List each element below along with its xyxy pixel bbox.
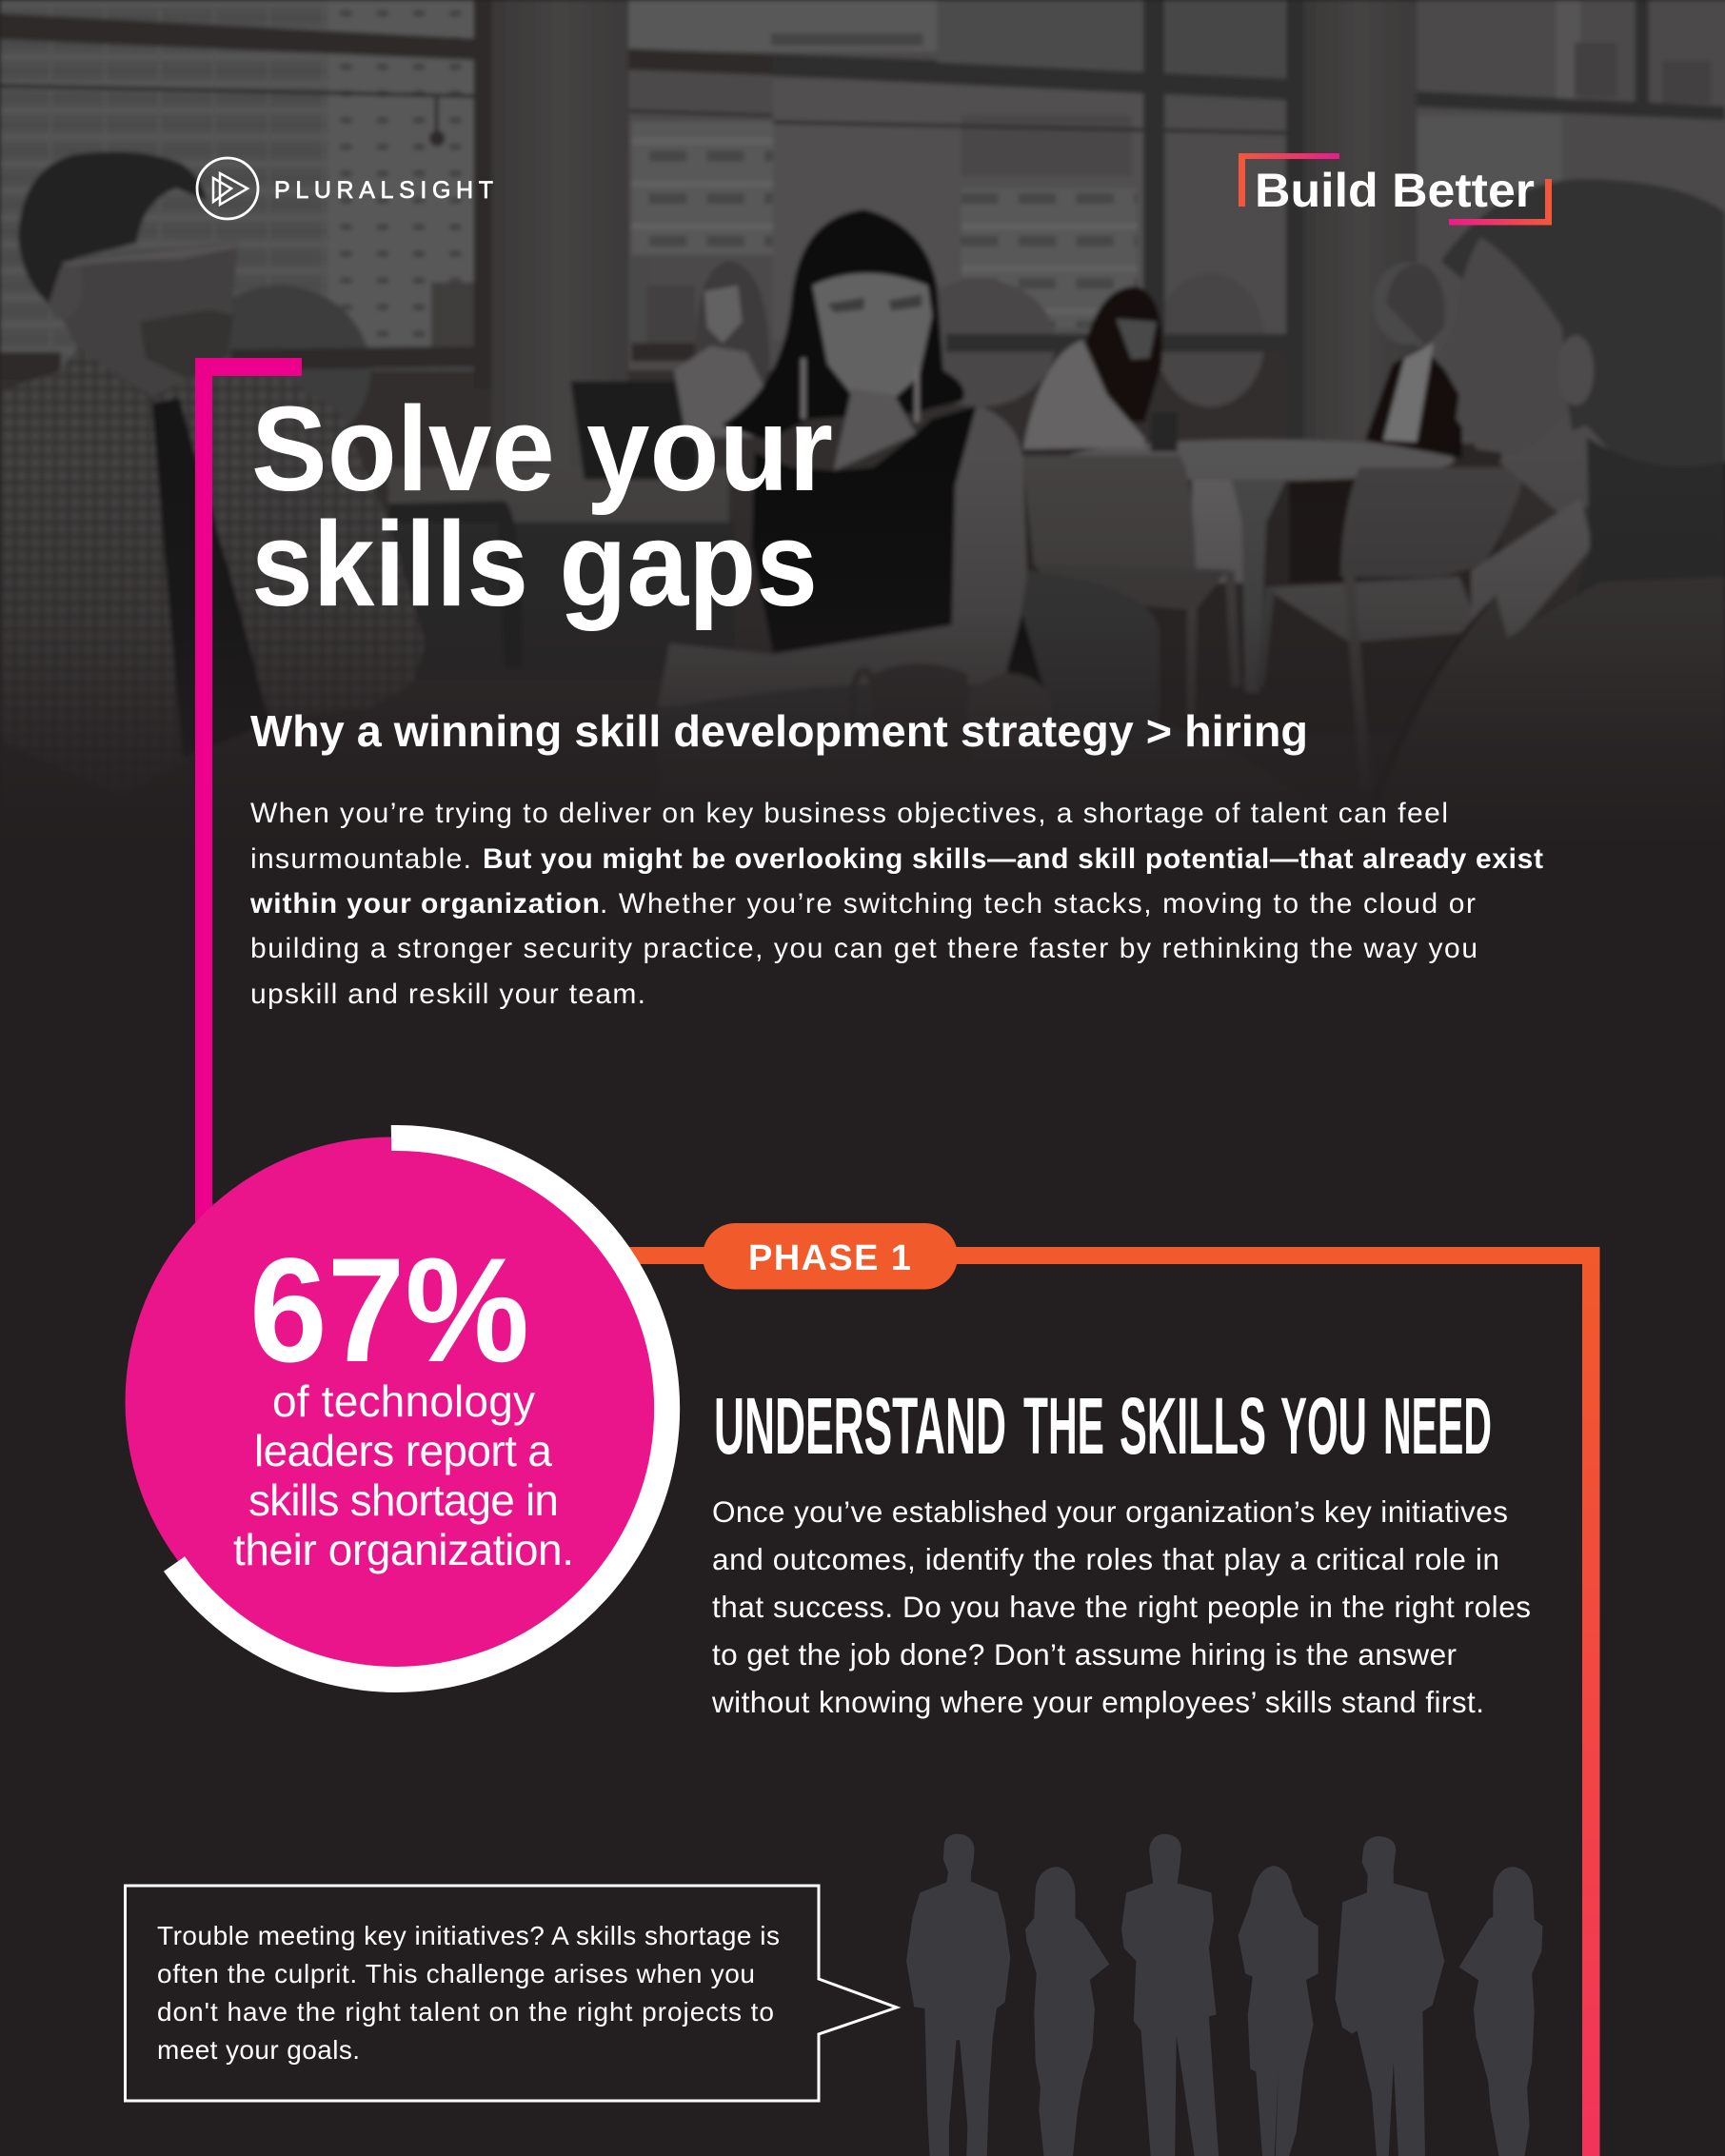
title bbox=[251, 382, 833, 631]
phase 1 text block: without knowing where your employees’ skills stand first. bbox=[711, 1685, 1484, 1719]
phase 1 text block bbox=[711, 1494, 1531, 1719]
phase 1 text block: and outcomes, identify the roles that play a critical role in bbox=[712, 1542, 1499, 1576]
central woman bbox=[658, 209, 1356, 850]
intro text block: But you might be overlooking skills—and skill potential—that already exist bbox=[483, 843, 1543, 875]
bracket: bottom right bbox=[1449, 179, 1552, 225]
column left bbox=[492, 0, 628, 467]
seated man bbox=[0, 151, 425, 796]
silhouette: man 2 bbox=[1121, 1834, 1219, 2156]
right window view bbox=[773, 0, 1725, 462]
foreground woman on right bbox=[1365, 179, 1725, 850]
phase 1 pill: PHASE 1 bbox=[748, 1238, 911, 1278]
icon: Pluralsight play mark bbox=[197, 158, 258, 219]
section heading: UNDERSTAND bbox=[714, 1381, 1006, 1471]
stat caption bbox=[233, 1376, 574, 1574]
laptop and table bbox=[388, 382, 735, 680]
woman working in background bbox=[1023, 287, 1178, 452]
window frames right bbox=[773, 0, 1725, 444]
silhouette: woman 2 bbox=[1239, 1866, 1319, 2156]
callout text: don't have the right talent on the right projects to bbox=[157, 1997, 774, 2027]
phase connector rail bbox=[609, 1247, 1599, 2156]
pink connector line bbox=[195, 358, 302, 1228]
phase 1 text block: Once you’ve established your organization’s key initiatives bbox=[712, 1494, 1508, 1529]
intro text block: . Whether you’re switching tech stacks, moving to the cloud or bbox=[600, 888, 1476, 920]
callout text: meet your goals. bbox=[157, 2035, 360, 2065]
stat caption: of technology bbox=[272, 1376, 535, 1426]
title: skills gaps bbox=[251, 497, 818, 631]
callout outline bbox=[126, 1886, 897, 2101]
callout text: Trouble meeting key initiatives? A skills shortage is bbox=[157, 1921, 780, 1950]
intro text block: When you’re trying to deliver on key business objectives, a shortage of talent can feel bbox=[250, 798, 1448, 829]
phase 1 text block: that success. Do you have the right people in the right roles bbox=[712, 1590, 1531, 1624]
centre window view bbox=[628, 0, 957, 370]
silhouettes of team members bbox=[906, 1834, 1542, 2156]
title: Solve your bbox=[251, 382, 833, 516]
wordmark: PLURALSIGHT bbox=[274, 177, 493, 204]
right half of photo bbox=[658, 0, 1725, 850]
stat circle: 67% bbox=[126, 1137, 667, 1679]
section heading: THE bbox=[1023, 1381, 1104, 1471]
bracket: top left bbox=[1239, 153, 1339, 207]
window frames left bbox=[0, 0, 952, 388]
subheading: Why a winning skill development strategy > hiring bbox=[250, 706, 1308, 756]
callout: speech box bbox=[126, 1886, 897, 2101]
stat caption: leaders report a bbox=[254, 1426, 552, 1475]
pink disc bbox=[126, 1137, 657, 1669]
infographic canvas: NEED bbox=[1383, 1381, 1492, 1471]
silhouette: man 1 bbox=[906, 1834, 1010, 2156]
silhouette: woman 1 bbox=[1025, 1867, 1109, 2156]
callout text bbox=[157, 1921, 780, 2065]
silhouette: man 3 bbox=[1336, 1836, 1444, 2156]
silhouette: woman 3 bbox=[1459, 1867, 1542, 2156]
section heading: SKILLS bbox=[1120, 1381, 1266, 1471]
phase 1 text block: to get the job done? Don’t assume hiring is the answer bbox=[712, 1637, 1457, 1671]
intro text block: building a stronger security practice, you can get there faster by rethinking the way you bbox=[250, 933, 1477, 964]
left half of photo bbox=[0, 0, 957, 796]
stat caption: their organization. bbox=[233, 1525, 574, 1574]
man in background bbox=[1365, 263, 1462, 459]
callout text: often the culprit. This challenge arises when you bbox=[157, 1959, 755, 1988]
logo: Pluralsight bbox=[197, 158, 493, 219]
wordmark: Build Better bbox=[1255, 164, 1535, 217]
intro text block: insurmountable. bbox=[250, 843, 471, 875]
progress ring bbox=[174, 1137, 667, 1679]
intro text block: upskill and reskill your team. bbox=[250, 979, 645, 1010]
phase 1 pill bbox=[703, 1223, 958, 1289]
column right bbox=[1304, 0, 1417, 449]
intro text block: within your organization bbox=[249, 888, 600, 920]
small background woman bbox=[674, 261, 770, 437]
logo: Build Better bbox=[1239, 153, 1552, 225]
stat value: 67% bbox=[249, 1228, 529, 1394]
intro text block bbox=[249, 798, 1543, 1010]
background photo: people in a cafe bbox=[0, 0, 1725, 871]
stat caption: skills shortage in bbox=[248, 1475, 559, 1525]
left window view bbox=[0, 0, 492, 455]
section heading: YOU bbox=[1280, 1381, 1367, 1471]
far furniture bbox=[1016, 440, 1522, 789]
